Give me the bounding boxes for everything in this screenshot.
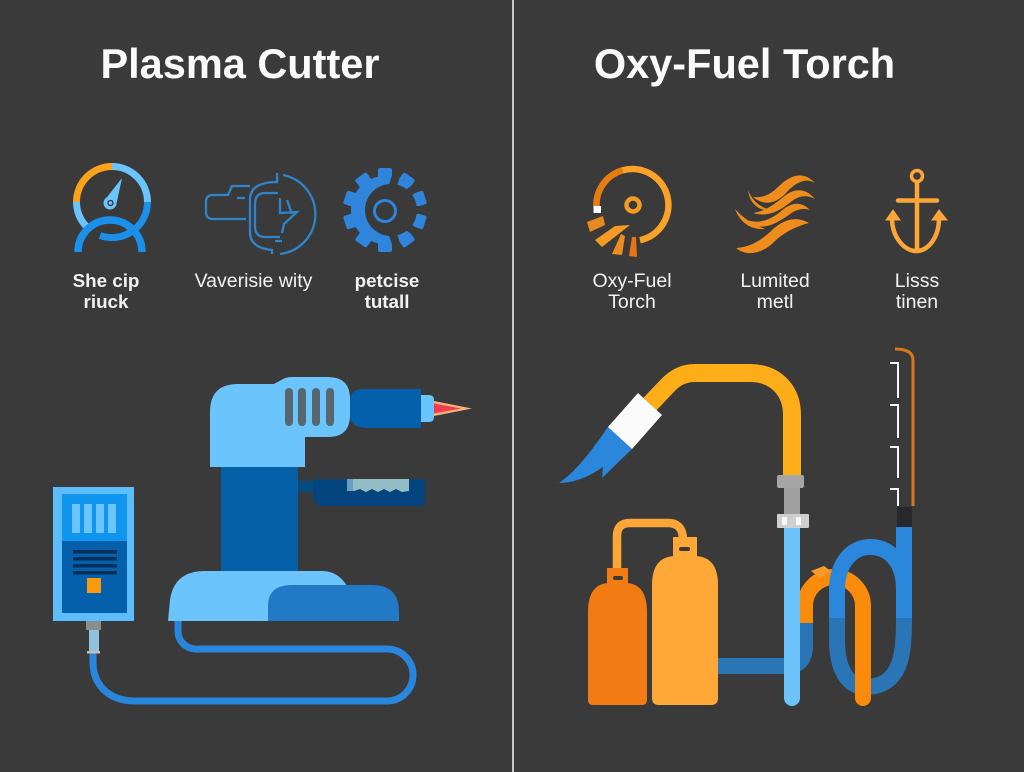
label: lisss tinen: Lisss xyxy=(895,270,939,292)
gray coupling xyxy=(777,475,809,528)
label: petcise tutall: petcise xyxy=(355,270,419,291)
label: petcise tutall: tutall xyxy=(365,291,409,312)
label: oxy-fuel torch xyxy=(592,270,672,313)
label: vaverisie wity: Vaverisie wity xyxy=(195,270,313,292)
black connector xyxy=(897,507,912,527)
label: she cip: riuck xyxy=(84,291,129,312)
small tank xyxy=(588,568,647,705)
gas tube between tanks xyxy=(617,523,683,570)
light blue vertical pipe xyxy=(784,526,800,706)
illustration: oxy-fuel torch set xyxy=(559,349,913,706)
torch tip xyxy=(559,427,632,483)
label: lumited metl: Lumited xyxy=(740,270,810,292)
power cable xyxy=(93,621,413,701)
white collar xyxy=(608,393,662,449)
power supply unit xyxy=(53,487,134,654)
label: oxy-fuel torch: Torch xyxy=(608,291,656,313)
blue loop upper xyxy=(837,527,904,618)
blue loop lower xyxy=(837,618,904,687)
torch head xyxy=(210,377,472,467)
column xyxy=(221,460,298,575)
label: lisss tinen xyxy=(895,270,939,313)
label: lisss tinen: tinen xyxy=(896,291,938,313)
title: oxy-fuel torch: Oxy-Fuel Torch xyxy=(594,40,895,87)
thin orange wire xyxy=(895,349,913,506)
label: lumited metl: metl xyxy=(757,291,793,313)
tray with blade xyxy=(298,479,425,506)
label: petcise tutall xyxy=(355,270,419,312)
white tick marks xyxy=(890,363,898,506)
icon: waves xyxy=(735,175,815,253)
base xyxy=(168,571,399,621)
title: plasma cutter: Plasma Cutter xyxy=(100,40,380,87)
label: oxy-fuel torch: Oxy-Fuel xyxy=(592,270,672,292)
icon: torch outline xyxy=(206,173,315,254)
blue link hose xyxy=(718,623,805,666)
large tank xyxy=(652,537,718,705)
illustration: plasma cutter machine xyxy=(53,377,472,701)
label: she cip xyxy=(73,270,139,312)
icon: gear xyxy=(343,168,427,252)
icon: orange ring with rays xyxy=(587,169,668,257)
icon: anchor xyxy=(886,170,947,251)
orange hose xyxy=(805,566,871,706)
label: lumited metl xyxy=(740,270,810,313)
label: she cip: She cip xyxy=(73,270,139,291)
icon: gauge xyxy=(76,166,148,252)
orange torch hose xyxy=(650,373,792,476)
